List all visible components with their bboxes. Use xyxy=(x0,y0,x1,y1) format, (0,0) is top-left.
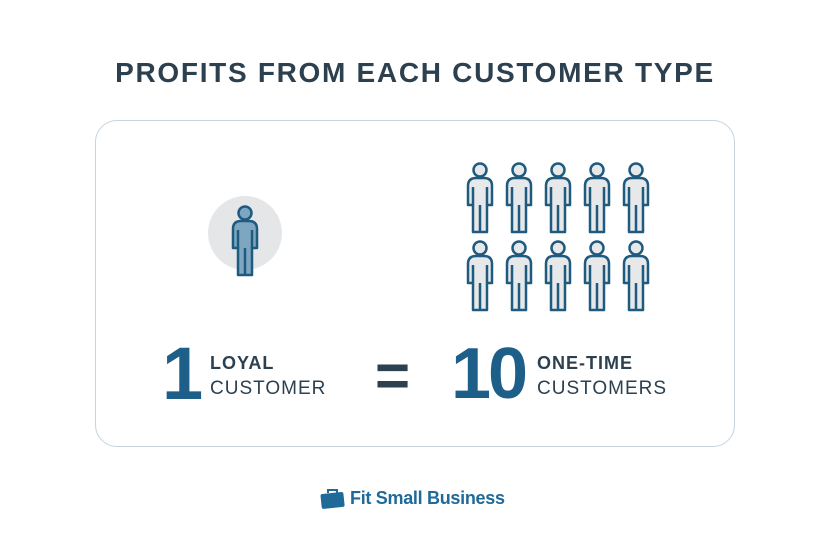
logo: Fit Small Business xyxy=(350,488,505,508)
text: 10 one-time customers: CUSTOMERS xyxy=(537,378,667,399)
panel xyxy=(95,120,735,447)
text: 1 loyal customer: 1 xyxy=(162,332,203,415)
text: 1 loyal customer xyxy=(162,332,326,415)
text: 10 one-time customers xyxy=(451,334,667,414)
icon grid: ten one-time customers xyxy=(466,162,650,312)
text: 10 one-time customers: ONE-TIME xyxy=(537,353,633,373)
icon: loyal customer xyxy=(208,196,282,276)
text: 1 loyal customer: CUSTOMER xyxy=(210,378,326,399)
title: PROFITS FROM EACH CUSTOMER TYPE xyxy=(115,57,715,88)
equals sign: = xyxy=(375,342,410,409)
text: 1 loyal customer: LOYAL xyxy=(210,353,274,373)
text: 10 one-time customers: 10 xyxy=(451,334,525,414)
icon: briefcase xyxy=(320,489,345,509)
